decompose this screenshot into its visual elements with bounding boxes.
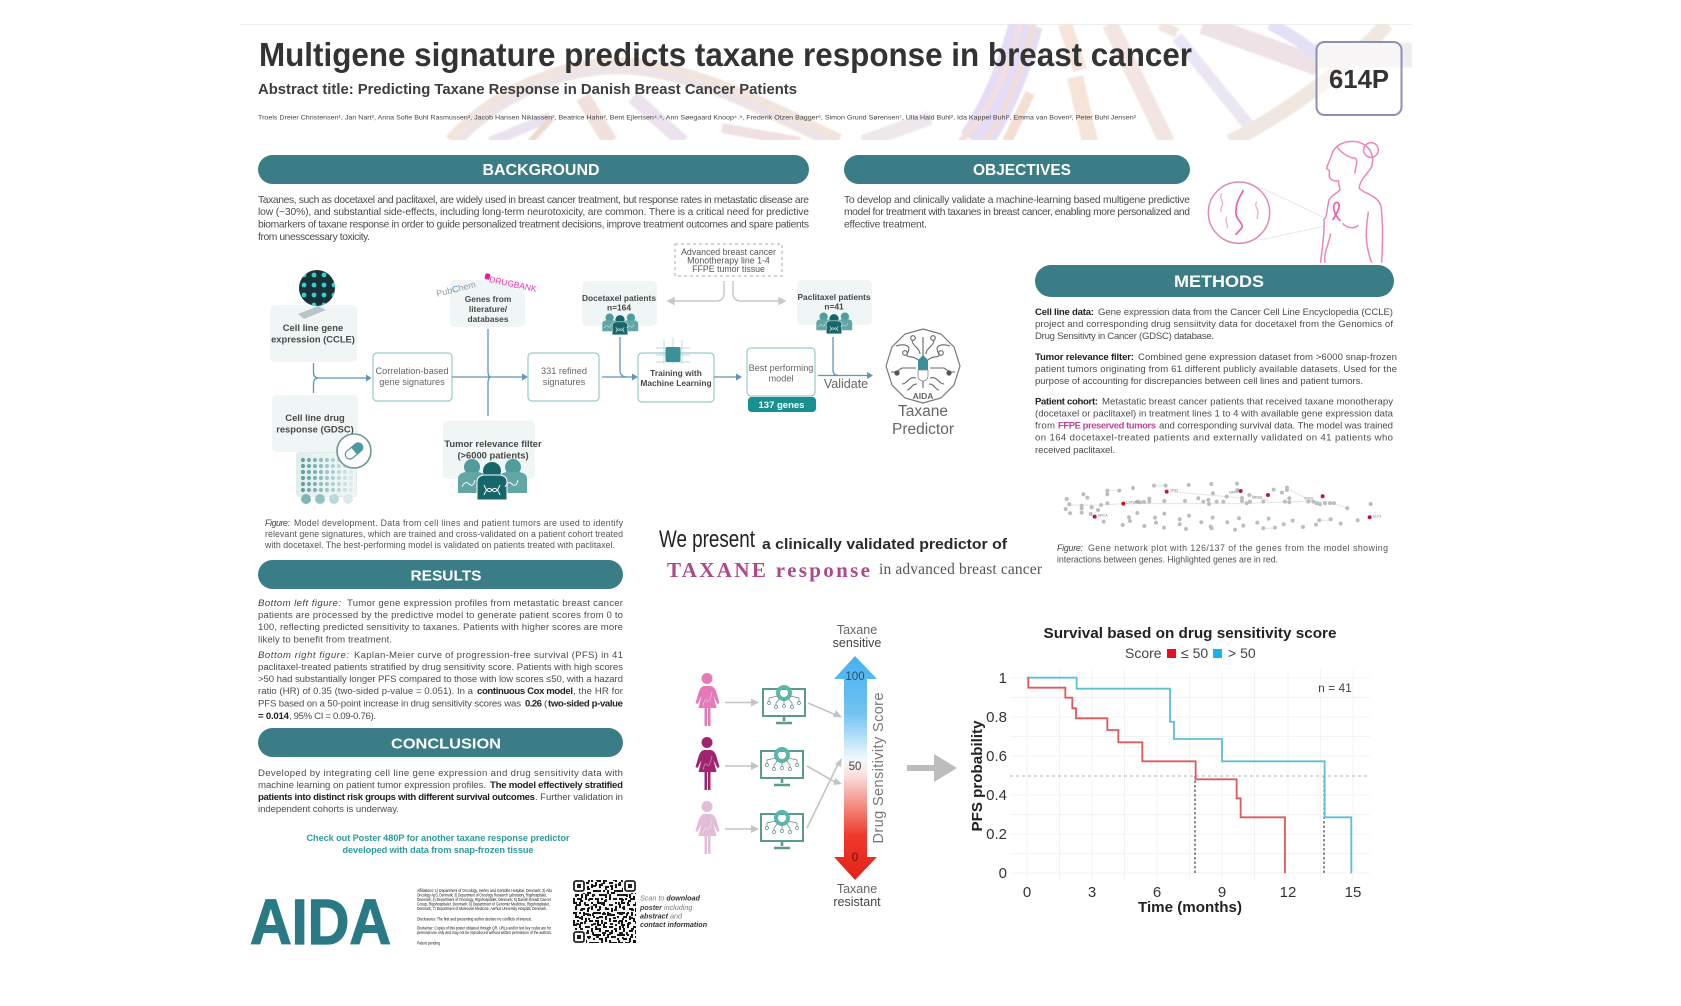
box: docetaxel patients [582,281,657,335]
y axis title: PFS probability [970,721,986,831]
text: bottom left figure: patients are processed by the predictive model to generate patient scores from 0 to [258,610,623,621]
arrow: validate: Validate [824,377,868,391]
box: cell line drug response [272,395,358,452]
arrow: correlation to refined signatures [452,329,528,416]
poster number badge [1316,42,1402,115]
box: tumor relevance filter: (>6000 patients) [457,450,529,460]
arrow: training to model [714,374,742,380]
arrow: inputs to correlation [314,363,372,393]
label: taxane predictor [892,403,954,438]
curve: score at or below 50 [1028,678,1285,873]
text: bottom left figure: likely to benefit from treatment. [258,634,392,646]
text: scan prompt: poster including [639,903,692,912]
heading: results: RESULTS [410,568,482,584]
heading: objectives [844,155,1190,184]
icon: patient pink [696,673,720,726]
x axis labels: 15 [1345,884,1361,901]
caption: gene network figure: Gene network plot with 126/137 of the genes from the model showing [1088,543,1388,553]
heading: background: BACKGROUND [482,162,600,179]
chart: gene network plot: CYP3A4 [1126,500,1139,504]
text: patient cohort: and corresponding survival data. The model was trained [1159,420,1393,432]
text: affiliations and disclosures: Oncology ApS, Denmark; 3) Department of Oncology Research Laboratory, Rigshospitalet, [417,892,547,898]
callout: poster 480P [306,833,570,855]
text: patient cohort: Patient cohort: [1035,396,1098,408]
legend [1125,645,1256,661]
text: patient cohort: on 164 docetaxel-treated patients and externally validated on 41 patients who [1035,432,1393,444]
label: taxane sensitive: Taxane [837,623,877,637]
icon: model monitor 2 [761,749,803,785]
x axis labels: 12 [1280,884,1296,901]
title: Multigene signature predicts taxane response in breast cancer [259,36,1192,73]
median lines [1010,776,1368,873]
caption: gene network figure: interactions between genes. Highlighted genes are in red. [1057,554,1278,564]
y axis labels: 1 [999,670,1007,687]
box: tumor relevance filter: Tumor relevance filter [444,438,542,449]
icon: well plate [296,452,357,504]
chart: Kaplan-Meier survival [970,626,1370,916]
text: bottom right figure: >50 had substantially longer PFS compared to those with low scores ≤50, with a hazard [258,674,623,685]
caption: model development figure: relevant gene signatures, which are trained and cross-validated on a patient cohort treated [265,529,623,539]
text: background: low (~30%), and substantial side-effects, including long-term neurotoxicity, are common. There is a critical need for predictive [258,207,809,218]
text: tumor relevance filter: patient tumors originating from 61 different publicly available datasets. Used for the [1035,364,1397,375]
grid [1010,670,1370,880]
text: bottom right figure: 0.26 [525,698,542,710]
poster number badge: 614P [1329,64,1389,94]
text: patient cohort: (docetaxel or paclitaxel) in treatment lines 1 to 4 with available gene expression data [1035,408,1394,420]
box: best performing model: Best performing [749,363,813,373]
text: tumor relevance filter: purpose of accounting for discrepancies between cell lines and patient tumors. [1035,376,1363,387]
callout: poster 480P: Check out Poster 480P for another taxane response predictor [306,833,570,843]
text: cell line data: Cell line data: [1035,307,1094,318]
x axis labels [1023,884,1361,901]
text: background: Taxanes, such as docetaxel and paclitaxel, are widely used in breast cancer treatment, but response rates in metastatic disease are [258,195,809,206]
caption: gene network figure: Figure: [1057,543,1084,553]
callout: we present: a clinically validated predictor of [762,536,1008,553]
text: background [258,195,809,243]
icon: patient light [696,801,720,854]
x axis labels: 9 [1218,884,1226,901]
box: training with machine learning: Training with [650,368,702,378]
text: conclusion: machine learning on patient tumor expression profiles. [258,780,486,791]
scale arrow: drug sensitivity score: 0 [852,852,858,864]
text: objectives: effective treatment. [844,220,927,230]
box: eligibility criteria: Advanced breast cancer [681,247,776,257]
chart: gene network plot: BRCA [1098,514,1108,518]
text: patient cohort: received paclitaxel. [1035,445,1115,456]
text: bottom right figure: Kaplan-Meier curve of progression-free survival (PFS) in 41 [354,650,623,661]
legend: Score [1125,645,1162,661]
text: bottom right figure: = 0.014 [258,711,290,722]
icon: QR code [573,880,636,943]
heading: conclusion: CONCLUSION [391,736,501,752]
panel: methods [1035,265,1397,456]
text: objectives: model for treatment with taxanes in breast cancer, enabling more personalized and [844,207,1190,218]
text: bottom right figure: , the HR for [573,686,624,697]
text: tumor relevance filter: Combined gene expression dataset from >6000 snap-frozen [1138,352,1397,363]
text: patient cohort [1035,396,1394,456]
curve: score above 50 [1027,678,1351,873]
text: affiliations and disclosures: Group, Rigshospitalet, Denmark; 6) Department of Genomic Medicine, Rigshospitalet, [417,902,550,906]
label: taxane resistant: Taxane [837,882,877,896]
text: bottom left figure: Bottom left figure: [258,598,341,609]
callout: we present [659,526,1043,582]
chart title: Survival based on drug sensitivity score [1044,626,1336,642]
sample size: n = 41 [1318,681,1352,695]
x axis title: Time (months) [1138,900,1242,916]
box: docetaxel patients: n=164 [607,302,631,312]
caption: model development figure [264,518,624,550]
arrow: validate [818,337,873,391]
caption: gene network figure [1057,543,1388,564]
icon: model monitor 1 [763,687,805,723]
label: 137 genes: 137 genes [759,400,804,411]
logo: AIDA: AIDA [250,886,391,958]
box: genes from literature: Genes from [465,294,511,304]
y axis labels: 0.8 [986,709,1007,726]
panel: results [258,560,624,722]
box: cell line gene expression: Cell line gene [283,322,343,333]
callout: we present: in advanced breast cancer [879,561,1043,578]
legend: ≤ 50 [1181,645,1208,661]
heading: methods: METHODS [1174,272,1264,291]
box: correlation-based signatures: Correlation-based [375,366,449,376]
heading: conclusion [258,728,623,757]
box: genes from literature [450,280,525,327]
text: background: biomarkers of taxane response in order to guide personalized treatment decisions, improve treatment outcomes and spare patients [258,220,809,230]
x axis labels: 0 [1023,884,1031,901]
text: tumor relevance filter: Tumor relevance filter: [1035,352,1134,363]
box: training with machine learning [638,338,714,402]
icon: taxane predictor: AIDA [913,391,933,401]
arrows: patients to model [725,698,759,833]
y axis labels: 0.2 [986,826,1007,843]
box: eligibility criteria: Monotherapy line 1-4 [687,256,770,266]
x axis labels: 6 [1153,884,1161,901]
box: docetaxel patients: Docetaxel patients [582,293,656,303]
text: bottom right figure [258,650,624,722]
figure: model development flow chart [270,244,960,504]
figure: patient score schematic [696,623,957,909]
box: paclitaxel patients [797,280,872,334]
text: bottom right figure: paclitaxel-treated patients stratified by drug sensitivity score. Patients with high scores [258,662,623,673]
text: affiliations and disclosures: Affiliations: 1) Department of Oncology, Herlev and Gentofte Hospital, Denmark; 2) Allo [417,888,552,893]
icon: taxane predictor [886,329,960,403]
caption: model development figure: Figure: [265,518,291,528]
text: bottom left figure: 100, reflecting predicted sensitivity to taxanes. Patients with higher scores are more [258,622,623,633]
caption: model development figure: Model development. Data from cell lines and patient tumors are used to identify [294,518,624,528]
text: conclusion: independent cohorts is underway. [258,804,399,815]
box: cell line gene expression [270,270,357,362]
label: taxane resistant [833,882,881,909]
text: cell line data: Drug Sensitivty in Cancer (GDSC) database. [1035,331,1214,342]
logo: DrugBank: DRUGBANK [488,274,538,294]
box: genes from literature: literature/ [469,304,508,314]
box: cell line drug response: Cell line drug [285,412,345,423]
text: conclusion: . Further validation in [535,792,623,803]
label: drug sensitivity score: Drug Sensitivity Score [871,692,887,844]
box: correlation-based signatures [373,353,452,401]
heading: results [258,560,623,589]
box: 331 refined signatures [528,353,599,401]
heading: objectives: OBJECTIVES [973,162,1071,179]
text: background: from unesscessary toxicity. [258,232,370,243]
scale arrow: drug sensitivity score: 50 [849,761,861,773]
heading: background [258,155,809,184]
panel: conclusion [258,728,623,855]
box: genes from literature: databases [468,314,509,324]
y axis labels: 0.6 [986,748,1007,765]
text: conclusion: patients into distinct risk groups with different survival outcomes [258,792,535,803]
chart: gene network plot: ELF3 [1373,514,1381,518]
text: scan prompt [639,894,708,929]
y axis labels: 0 [999,865,1007,882]
text: affiliations and disclosures: personal use only and may not be reproduced without written permission of the authors. [417,930,552,935]
callout: we present: We present [659,526,755,553]
icon: woman with tumour magnifier [1208,141,1383,263]
text: patient cohort: from [1035,420,1055,432]
arrow: score to survival [907,754,957,782]
box: 331 refined signatures: 331 refined [541,366,587,376]
box: eligibility criteria: FFPE tumor tissue [692,264,765,274]
text: cell line data [1035,307,1393,342]
icon: model monitor 3 [761,812,803,848]
text: bottom left figure: Tumor gene expression profiles from metastatic breast cancer [347,598,624,609]
callout: we present: TAXANE response [667,558,870,582]
chart: gene network plot: ABCB1 [1252,496,1263,500]
box: tumor relevance filter [443,421,542,500]
chart: gene network plot: MAP4 [1229,490,1238,494]
chart: gene network plot [1066,484,1381,530]
header band with DNA artwork [240,24,1412,142]
text: affiliations and disclosures: Denmark; 7) Department of Molecular Medicine, Aarhus University Hospital, Denmark. [417,906,547,911]
text: cell line data: project and corresponding drug sensiitvity data for docetaxel from the Genomics of [1035,319,1393,330]
chart: gene network plot: SOX9 [1304,496,1313,500]
logo: PubChem: PubChem [435,279,477,299]
text: bottom right figure: PFS based on a 50-point increase in drug sensitivity scores was [258,698,521,710]
text: objectives [844,195,1190,230]
panel: objectives [844,155,1190,230]
text: conclusion: The model effectively stratified [490,780,623,791]
text: scan prompt: contact information [640,920,708,929]
icon: patient dark [696,737,720,790]
text: tumor relevance filter [1035,352,1397,387]
arrows: model to score [807,703,842,828]
box: cell line gene expression: expression (CCLE) [271,334,355,344]
y axis labels [986,670,1007,882]
text: conclusion [258,768,623,815]
x axis labels: 3 [1088,884,1096,901]
arrow: refined signatures to training [602,337,638,380]
text: affiliations and disclosures [417,888,552,946]
text: bottom right figure: ( [544,698,548,710]
chart: gene network plot: TP53 [1170,489,1178,493]
heading: methods [1035,265,1394,297]
text: affiliations and disclosures: Denmark; 4) Department of Oncology, Rigshospitalet, Denmark; 5) Danish Breast Cancer [417,897,551,902]
box: paclitaxel patients: n=41 [824,302,844,312]
icon: pill [337,434,371,468]
label: taxane sensitive: sensitive [833,636,881,650]
text: bottom right figure: Bottom right figure: [258,650,349,661]
label: taxane resistant: resistant [833,895,881,909]
scale arrow: drug sensitivity score [834,656,877,880]
abstract title: Abstract title: Predicting Taxane Response in Danish Breast Cancer Patients [258,81,797,98]
text: affiliations and disclosures: Patent pending [417,940,440,946]
text: scan prompt: abstract and [640,912,683,920]
text: conclusion: Developed by integrating cell line gene expression and drug sensitivity data with [258,768,623,779]
label: taxane predictor: Predictor [892,421,954,438]
text: bottom right figure: two-sided p-value [548,698,623,710]
arrows: cohort split [668,281,785,304]
text: bottom right figure: continuous Cox model [477,686,573,697]
box: eligibility criteria [675,244,782,276]
authors: Troels Dreier Christensen¹, Jan Nart², Anna Sofie Buhl Rasmussen³, Jacob Hansen Niklassen², Beatrice Hahn², Bent Ejlertsen⁴˒⁵, Ann Søegaard Knoop⁴˒⁵, Frederik Otzen Bagger⁶, Simon Grund Sørensen⁷, Ulla Hald Buhl², Ida Kappel Buhl², Emma van Boven², Peter Buhl Jensen² [258,114,1136,122]
text: scan prompt: Scan to download [640,894,701,902]
scale arrow: drug sensitivity score: 100 [845,671,865,683]
panel: background [258,155,809,243]
box: paclitaxel patients: Paclitaxel patients [797,292,871,302]
box: best performing model [747,348,816,412]
survival curves [1027,678,1351,873]
text: bottom right figure: , 95% CI = 0.09-0.76). [289,711,376,722]
text: cell line data: Gene expression data from the Cancer Cell Line Encyclopedia (CCLE) [1098,307,1393,318]
text: bottom right figure: ratio (HR) of 0.35 (two-sided p-value = 0.051). In a [258,686,474,697]
box: 331 refined signatures: signatures [543,377,586,387]
text: objectives: To develop and clinically validate a machine-learning based multigene predictive [844,195,1190,206]
y axis labels: 0.4 [986,787,1007,804]
label: taxane sensitive [833,623,881,650]
label: taxane predictor: Taxane [898,403,948,420]
text: patient cohort: Metastatic breast cancer patients that received taxane monotherapy [1102,396,1393,408]
box: correlation-based signatures: gene signatures [379,377,445,387]
box: cell line drug response: response (GDSC) [276,424,354,434]
box: best performing model: model [768,374,794,384]
box: training with machine learning: Machine Learning [640,378,712,388]
text: affiliations and disclosures: Disclaimer: Copies of this poster obtained through QR, URLs and/or text key codes are for [417,926,551,930]
text: affiliations and disclosures: Disclosures: The first and presenting author declare no conflicts of interest. [417,916,532,922]
legend: > 50 [1228,645,1256,661]
caption: model development figure: with docetaxel. The best-performing model is validated on patients treated with paclitaxel. [264,540,615,550]
callout: poster 480P: developed with data from snap-frozen tissue [342,845,534,855]
text: patient cohort: FFPE preserved tumors [1058,420,1156,432]
text: bottom left figure [258,598,624,646]
